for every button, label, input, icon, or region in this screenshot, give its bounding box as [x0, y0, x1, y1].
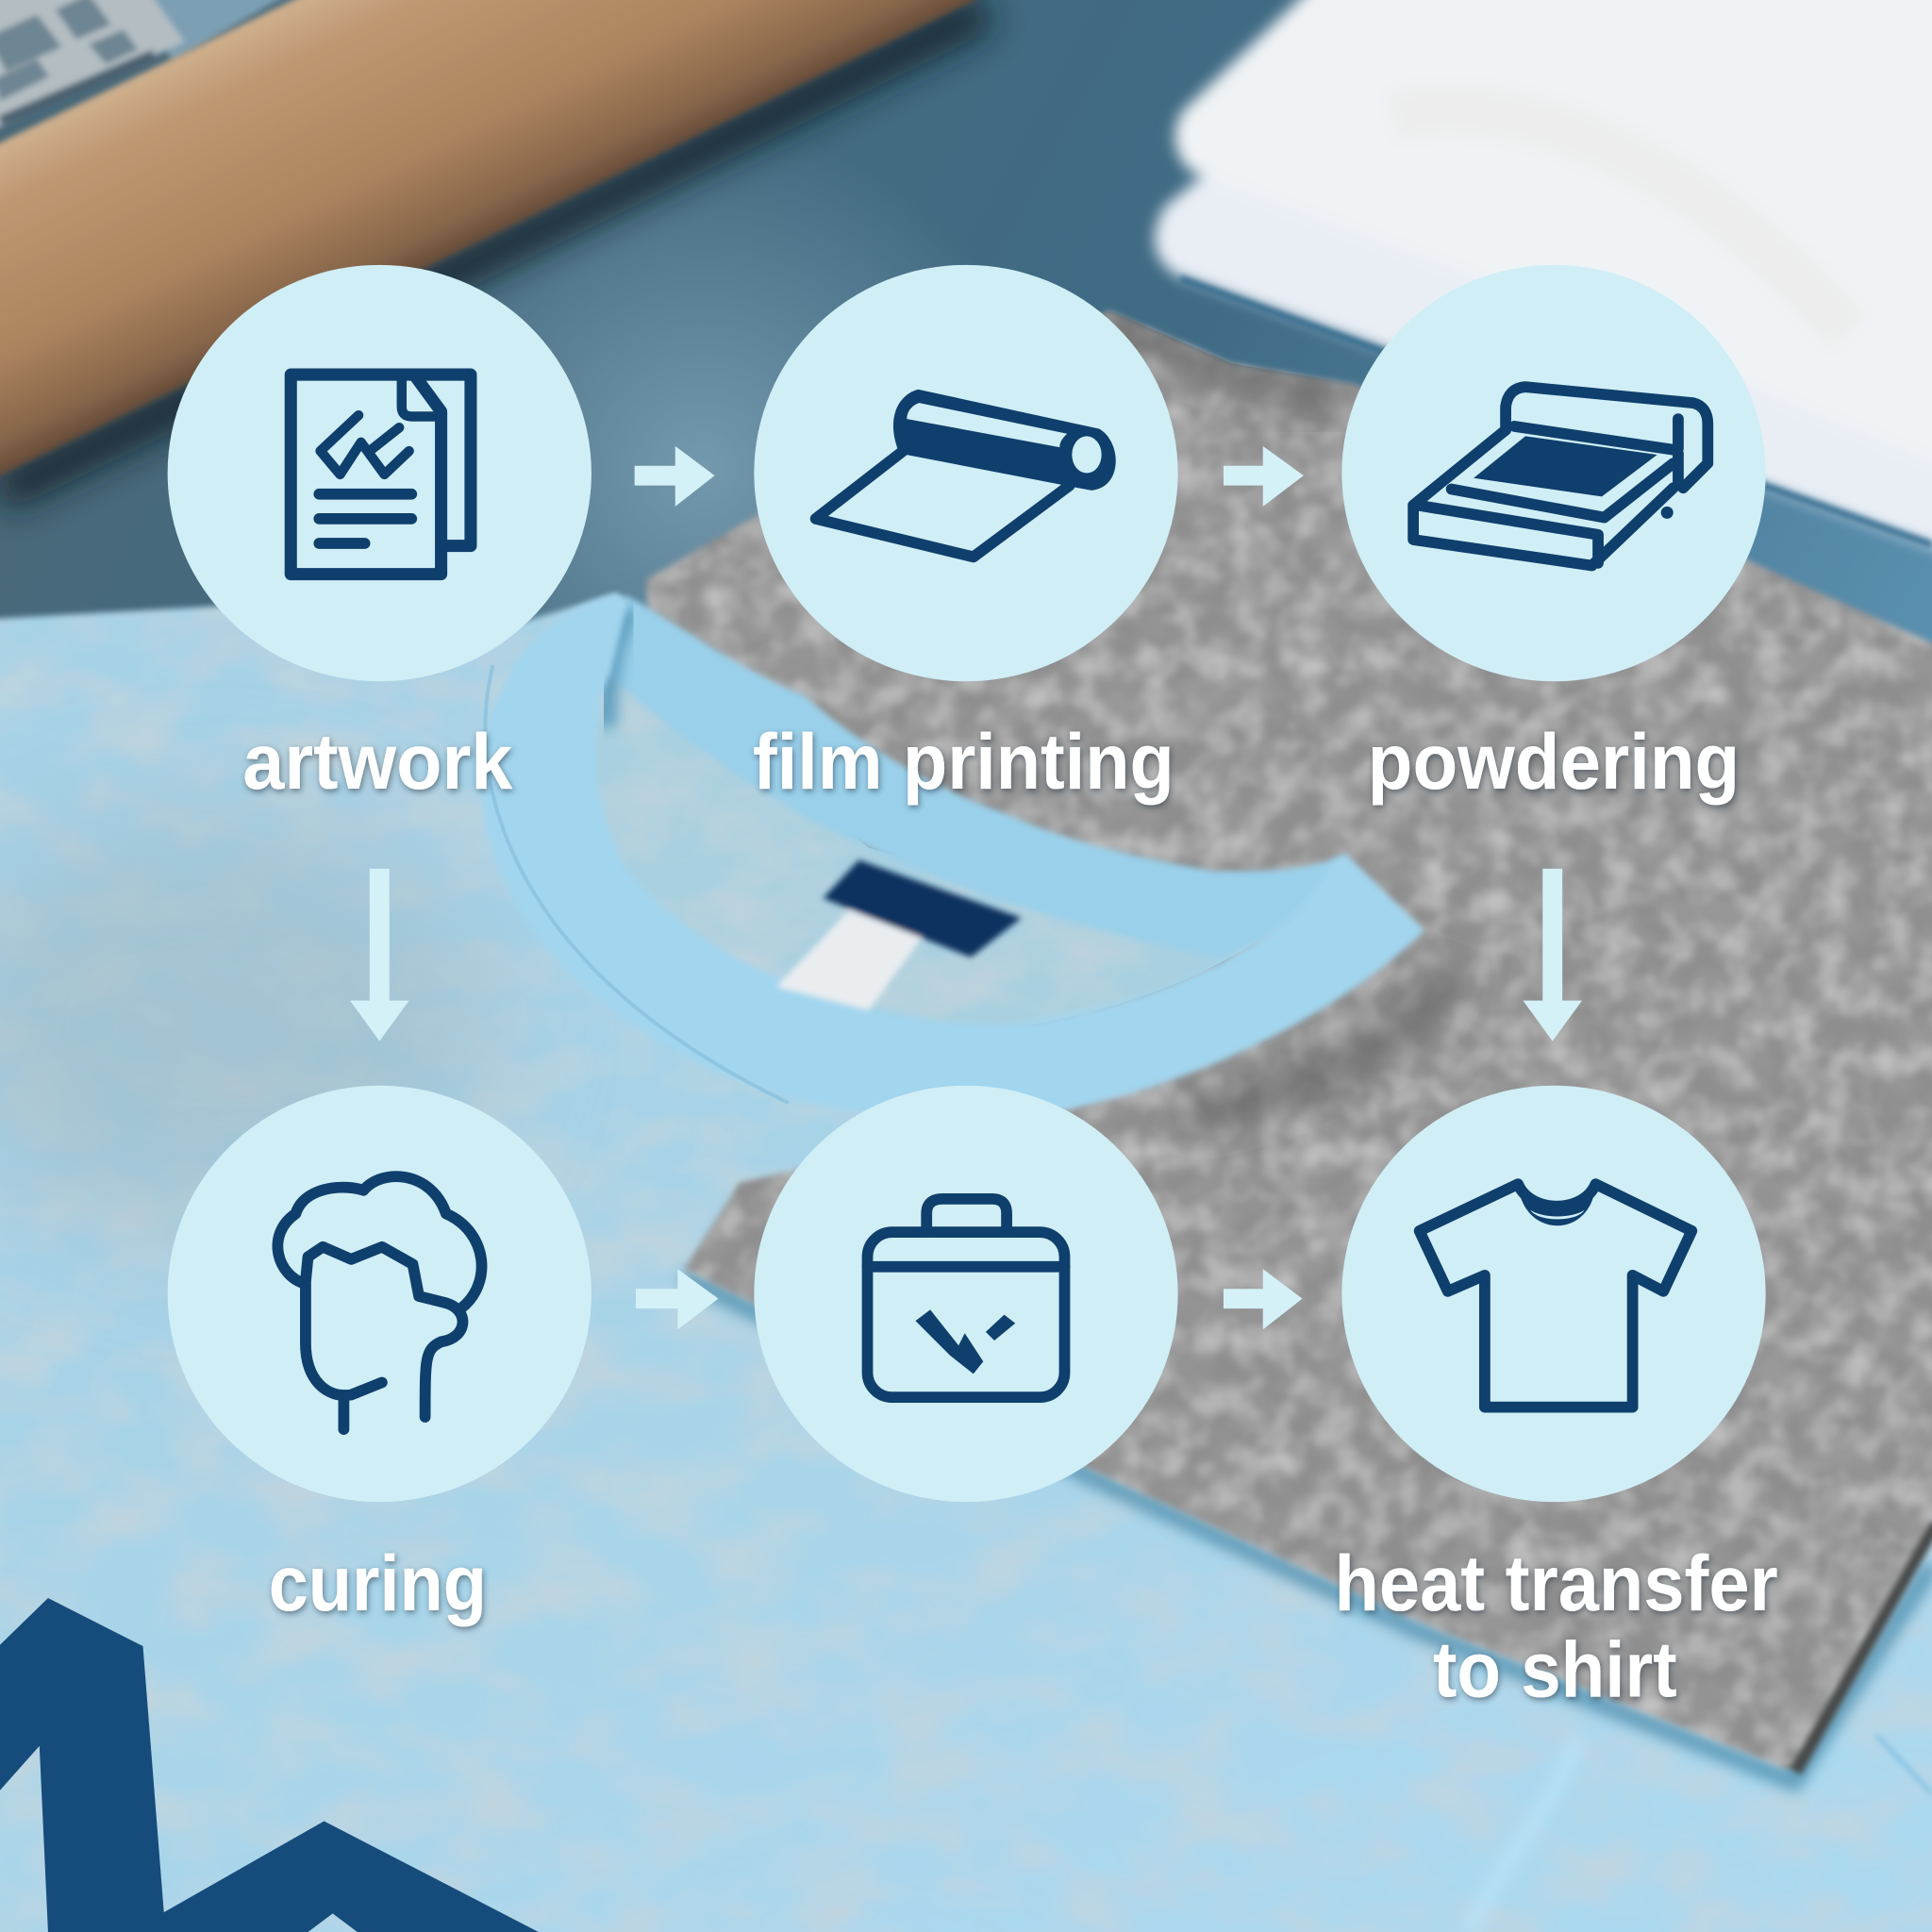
- fold shadows on grey shirt: [1183, 961, 1448, 1115]
- corner of table above tube: [152, 0, 283, 60]
- label: heat transfer to shirt: to shirt: [1433, 1625, 1677, 1714]
- back collar band: [610, 596, 1345, 958]
- icon: document with artwork: [291, 375, 471, 575]
- stacked white shirts: [1155, 0, 1932, 569]
- circle: [1341, 1086, 1766, 1502]
- arrow: case to shirt: [1224, 1269, 1303, 1329]
- circle: [754, 265, 1178, 681]
- shadow under tube: [0, 9, 986, 492]
- icon: case: [868, 1199, 1064, 1397]
- shirt crease, bottom right: [1468, 1739, 1579, 1932]
- inner neck shadow: [607, 608, 631, 727]
- label: artwork: artwork: [242, 717, 513, 806]
- label: curing: curing: [269, 1539, 487, 1627]
- film sheet: [816, 451, 1070, 557]
- sleeve seam, bottom right: [1876, 1735, 1932, 1794]
- shirt front collar: [480, 594, 1424, 1118]
- shadow cast by grey fold on blue shirt: [684, 1276, 1932, 1782]
- table surface: [0, 0, 1932, 645]
- shirt shadow on table: [1180, 278, 1932, 544]
- icon: cloud-haired head: [277, 1176, 482, 1429]
- roller end: [1072, 436, 1102, 474]
- cardboard tube: [0, 0, 981, 478]
- table light patch: [487, 182, 914, 620]
- dark underside of fold: [1791, 1521, 1932, 1770]
- step 1: artwork: [168, 265, 591, 681]
- arrow: film printing to powdering: [1224, 446, 1304, 507]
- icon: powder machine: [1413, 387, 1707, 566]
- navy logo print on shirt: [0, 1598, 539, 1932]
- step 2: film printing: [754, 265, 1178, 681]
- step 4: curing: [168, 1086, 591, 1502]
- label: heat transfer to shirt: heat transfer: [1335, 1539, 1778, 1627]
- icon: t-shirt: [1420, 1184, 1691, 1407]
- arrow: artwork down to curing: [350, 869, 409, 1041]
- collar stitching: [485, 665, 789, 1103]
- shirt neck interior: [595, 665, 1331, 1029]
- circle: [168, 265, 591, 681]
- label: heat transfer to shirt: [1335, 1539, 1778, 1714]
- keyboard corner: [0, 0, 185, 138]
- arrow: powdering down to heat transfer: [1523, 869, 1582, 1041]
- arrow: curing to case: [636, 1269, 718, 1329]
- step 3: powdering: [1341, 265, 1766, 681]
- roller body: [893, 390, 1116, 491]
- circle: [168, 1086, 591, 1502]
- label: powdering: powdering: [1368, 717, 1740, 806]
- arrow: artwork to film printing: [635, 446, 715, 507]
- neck label: [776, 860, 1022, 1010]
- icon: film roll: [816, 390, 1116, 557]
- step 5: heat press case: [754, 1086, 1178, 1502]
- circle: [754, 1086, 1178, 1502]
- blue shirt body: [0, 594, 1932, 1932]
- dark patches on grey shirt top: [1109, 323, 1343, 407]
- step 6: heat transfer to shirt: [1341, 1086, 1766, 1502]
- label: film printing: film printing: [753, 717, 1174, 806]
- grey shirt, folded front: [684, 930, 1932, 1768]
- circle: [1341, 265, 1766, 681]
- grey tint across left of shirt: [0, 813, 492, 1232]
- roller highlight: [907, 403, 1067, 447]
- grey shirt, back: [643, 308, 1932, 1091]
